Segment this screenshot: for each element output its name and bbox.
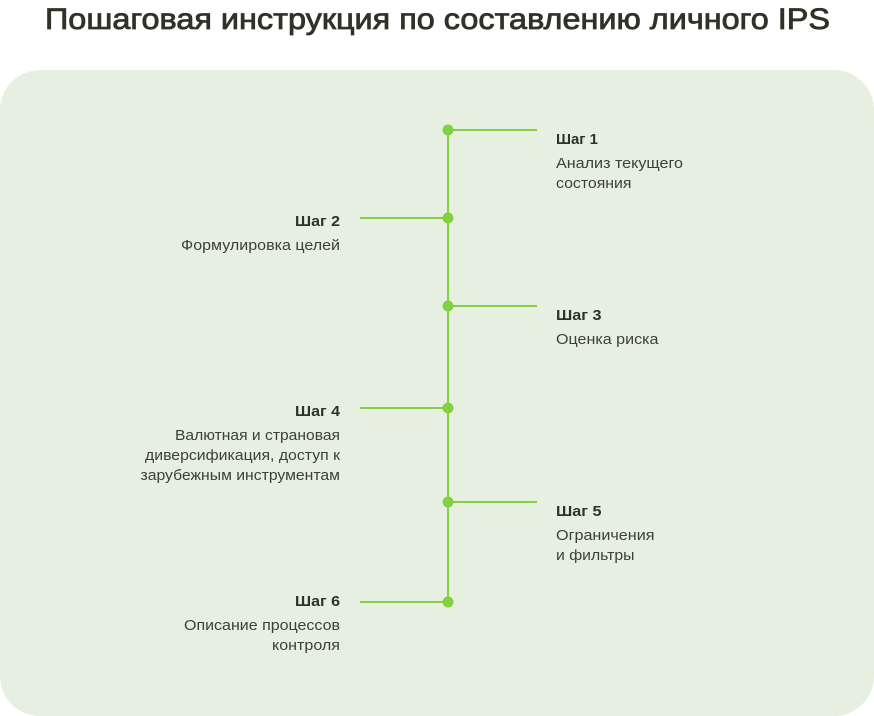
- step 6: контроля: [272, 637, 340, 654]
- step 3: Шаг 3: [556, 307, 602, 324]
- step 6: Шаг 6: [295, 593, 340, 610]
- step 2: Формулировка целей: [181, 237, 340, 254]
- step 4: [140, 403, 341, 484]
- step 5: и фильтры: [556, 547, 634, 564]
- step 4: зарубежным инструментам: [140, 467, 340, 484]
- step 1: состояния: [556, 175, 632, 192]
- step 2: [181, 213, 340, 254]
- step 2: Шаг 2: [295, 213, 340, 230]
- step 1: Анализ текущего: [556, 155, 683, 172]
- step 4: Шаг 4: [295, 403, 341, 420]
- step 3: [556, 307, 659, 348]
- step 6: [184, 593, 340, 654]
- timeline chart: [360, 124, 537, 608]
- step 1: Шаг 1: [556, 131, 598, 148]
- step 5: Ограничения: [556, 527, 654, 544]
- step 5: [556, 503, 654, 564]
- title: Пошаговая инструкция по составлению личного IPS: [45, 3, 830, 36]
- step 4: Валютная и страновая: [175, 427, 340, 444]
- step 6: Описание процессов: [184, 617, 340, 634]
- step 1: [556, 131, 683, 192]
- step 4: диверсификация, доступ к: [145, 447, 340, 464]
- step 3: Оценка риска: [556, 331, 659, 348]
- step 5: Шаг 5: [556, 503, 602, 520]
